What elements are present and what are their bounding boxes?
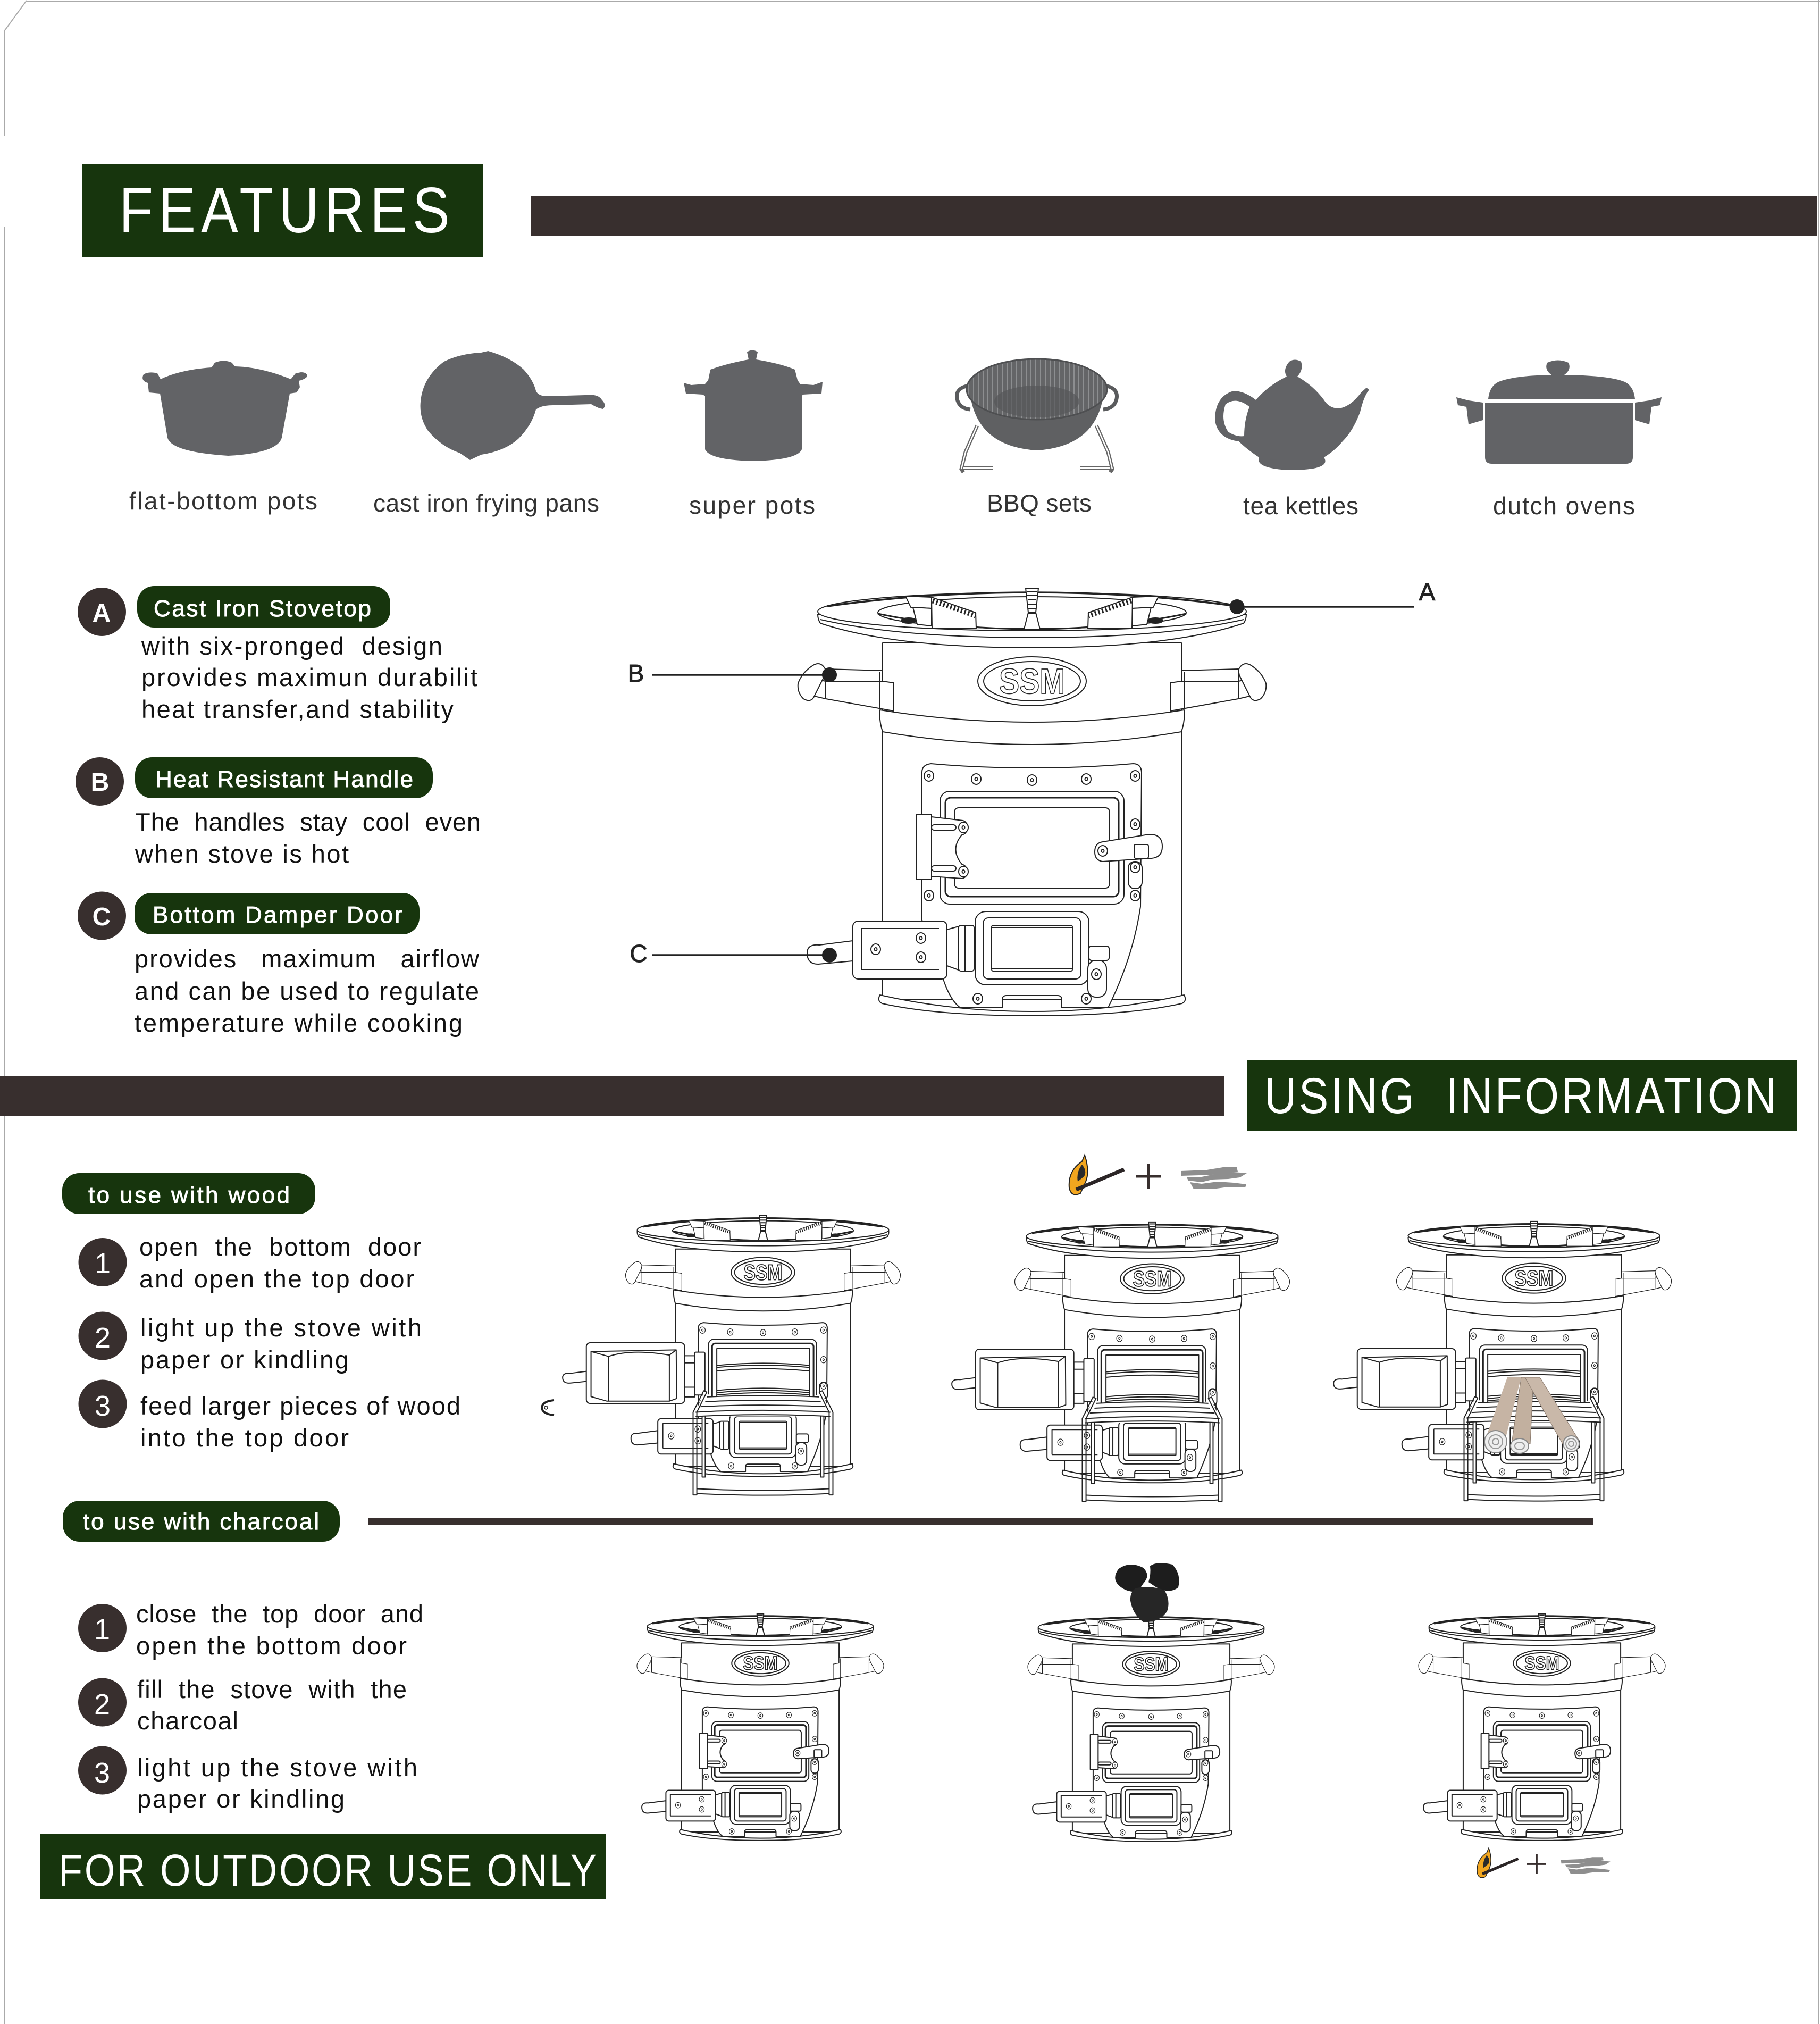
illustration: wood step 1 open stove: SSM <box>744 1261 782 1285</box>
features header bar <box>531 196 1817 236</box>
diagram: main stove with callouts <box>628 578 1436 1016</box>
label: BBQ sets: BBQ sets <box>987 489 1092 517</box>
step 1: close the top door and <box>136 1600 423 1628</box>
heading: FEATURES: FEATURES <box>119 174 450 247</box>
icon: flat-bottom pot <box>142 361 307 456</box>
step 3: 3 <box>94 1757 110 1789</box>
text: damper description: temperature while cooking <box>135 1009 463 1037</box>
step 1: 1 <box>94 1613 110 1645</box>
icon: match plus kindling (wood step 2) <box>1069 1155 1247 1194</box>
step 2: charcoal <box>137 1707 238 1735</box>
step 1 <box>78 1600 423 1660</box>
step 3: paper or kindling <box>137 1785 345 1813</box>
illustration: wood step 2 open stove: SSM <box>1133 1267 1171 1291</box>
text: handle description: The handles stay cool even <box>135 808 481 836</box>
illustration: charcoal step 1 stove: SSM <box>743 1653 778 1674</box>
badge A <box>78 588 126 636</box>
charcoal section rule <box>368 1518 1593 1525</box>
step 3: light up the stove with <box>137 1753 417 1782</box>
illustration: charcoal step 3 stove <box>1419 1614 1665 1841</box>
illustration: charcoal step 2 stove <box>1028 1615 1274 1842</box>
step 3 <box>79 1379 460 1452</box>
pill heading: to use with wood: to use with wood <box>88 1182 290 1208</box>
icon: super pot <box>684 350 823 461</box>
label: dutch ovens: dutch ovens <box>1493 492 1635 520</box>
illustration: wood logs in stove <box>1484 1377 1579 1453</box>
icon: BBQ set <box>957 359 1117 472</box>
pill heading: Heat Resistant Handle <box>135 757 433 798</box>
text: handle description: when stove is hot <box>135 840 349 868</box>
step 2: paper or kindling <box>140 1345 349 1374</box>
pill heading: to use with charcoal: to use with charcoal <box>83 1509 319 1535</box>
text: damper description <box>135 944 480 1037</box>
stray handle fragment <box>542 1400 554 1415</box>
step 2: light up the stove with <box>140 1314 422 1342</box>
text: damper description: provides maximum airflow <box>135 944 480 973</box>
label: cast iron frying pans: cast iron frying pans <box>373 489 599 517</box>
illustration: charcoal step 2 stove: SSM <box>1134 1654 1169 1675</box>
badge C: C <box>93 903 111 931</box>
illustration: charcoal step 3 stove: SSM <box>1524 1653 1559 1674</box>
section bar <box>0 1076 1224 1116</box>
step 1: open the bottom door <box>136 1632 407 1660</box>
step 2 <box>79 1311 422 1374</box>
callout C: C <box>630 940 648 967</box>
panel: to use with charcoal instructions <box>78 1600 423 1813</box>
icon: tea kettle <box>1215 359 1369 470</box>
badge A: A <box>93 599 111 628</box>
panel: feature A cast iron stovetop <box>78 586 477 723</box>
callout A: A <box>1419 578 1436 606</box>
pill heading: to use with wood <box>62 1173 315 1214</box>
callout A <box>1229 578 1436 614</box>
heading: FEATURES <box>82 164 483 257</box>
text: stovetop description: provides maximun durabilit <box>141 663 477 691</box>
step 2: 2 <box>94 1688 110 1720</box>
step 1: open the bottom door <box>139 1233 421 1261</box>
pill heading: Heat Resistant Handle: Heat Resistant Handle <box>155 766 413 792</box>
banner: FOR OUTDOOR USE ONLY: FOR OUTDOOR USE ONLY <box>58 1845 597 1895</box>
label: tea kettles: tea kettles <box>1243 492 1358 520</box>
step 1: 1 <box>95 1248 111 1279</box>
panel: compatible cookware icons <box>129 350 1662 520</box>
pill heading: Cast Iron Stovetop <box>137 586 390 628</box>
illustration: wood step 1 open stove <box>563 1216 900 1495</box>
main stove drawing: SSM <box>999 662 1065 701</box>
badge C <box>78 891 126 940</box>
text: stovetop description <box>141 632 477 723</box>
callout B <box>628 659 837 687</box>
step 2: fill the stove with the <box>137 1675 407 1703</box>
text: handle description <box>135 808 481 868</box>
text: stovetop description: heat transfer,and stability <box>141 695 454 723</box>
step 3: feed larger pieces of wood <box>140 1392 460 1420</box>
text: damper description: and can be used to regulate <box>135 977 479 1005</box>
main stove drawing <box>798 588 1266 1016</box>
heading: USING INFORMATION: USING INFORMATION <box>1264 1067 1777 1124</box>
icon: charcoal briquettes <box>1115 1563 1179 1622</box>
badge B <box>76 757 124 806</box>
label: super pots: super pots <box>689 491 815 519</box>
step 2 <box>78 1675 407 1735</box>
pill heading: Bottom Damper Door: Bottom Damper Door <box>153 902 402 928</box>
illustration: wood step 3 open stove: SSM <box>1515 1267 1553 1291</box>
panel: feature B heat resistant handle <box>76 757 481 868</box>
step 2: 2 <box>95 1322 111 1354</box>
step 1 <box>79 1233 421 1293</box>
label: flat-bottom pots: flat-bottom pots <box>129 487 317 515</box>
step 3: 3 <box>95 1390 111 1422</box>
icon: frying pan <box>421 351 605 460</box>
icon: match plus kindling (charcoal step 3) <box>1477 1848 1611 1878</box>
illustration: charcoal step 1 stove <box>637 1614 884 1841</box>
pill heading: to use with charcoal <box>63 1501 340 1542</box>
step 3: into the top door <box>140 1424 349 1452</box>
callout C <box>630 940 837 967</box>
panel: feature C bottom damper door <box>78 891 480 1037</box>
badge B: B <box>91 768 109 797</box>
panel: to use with wood instructions <box>62 1173 460 1452</box>
illustration: wood step 2 open stove <box>952 1222 1289 1502</box>
text: stovetop description: with six-pronged design <box>141 632 442 660</box>
pill heading: Cast Iron Stovetop: Cast Iron Stovetop <box>154 596 371 622</box>
step 3 <box>78 1746 417 1813</box>
illustration: wood step 3 open stove <box>1333 1222 1671 1501</box>
pill heading: Bottom Damper Door <box>135 893 420 934</box>
icon: dutch oven <box>1456 361 1662 464</box>
callout B: B <box>628 659 644 687</box>
step 1: and open the top door <box>139 1265 414 1293</box>
